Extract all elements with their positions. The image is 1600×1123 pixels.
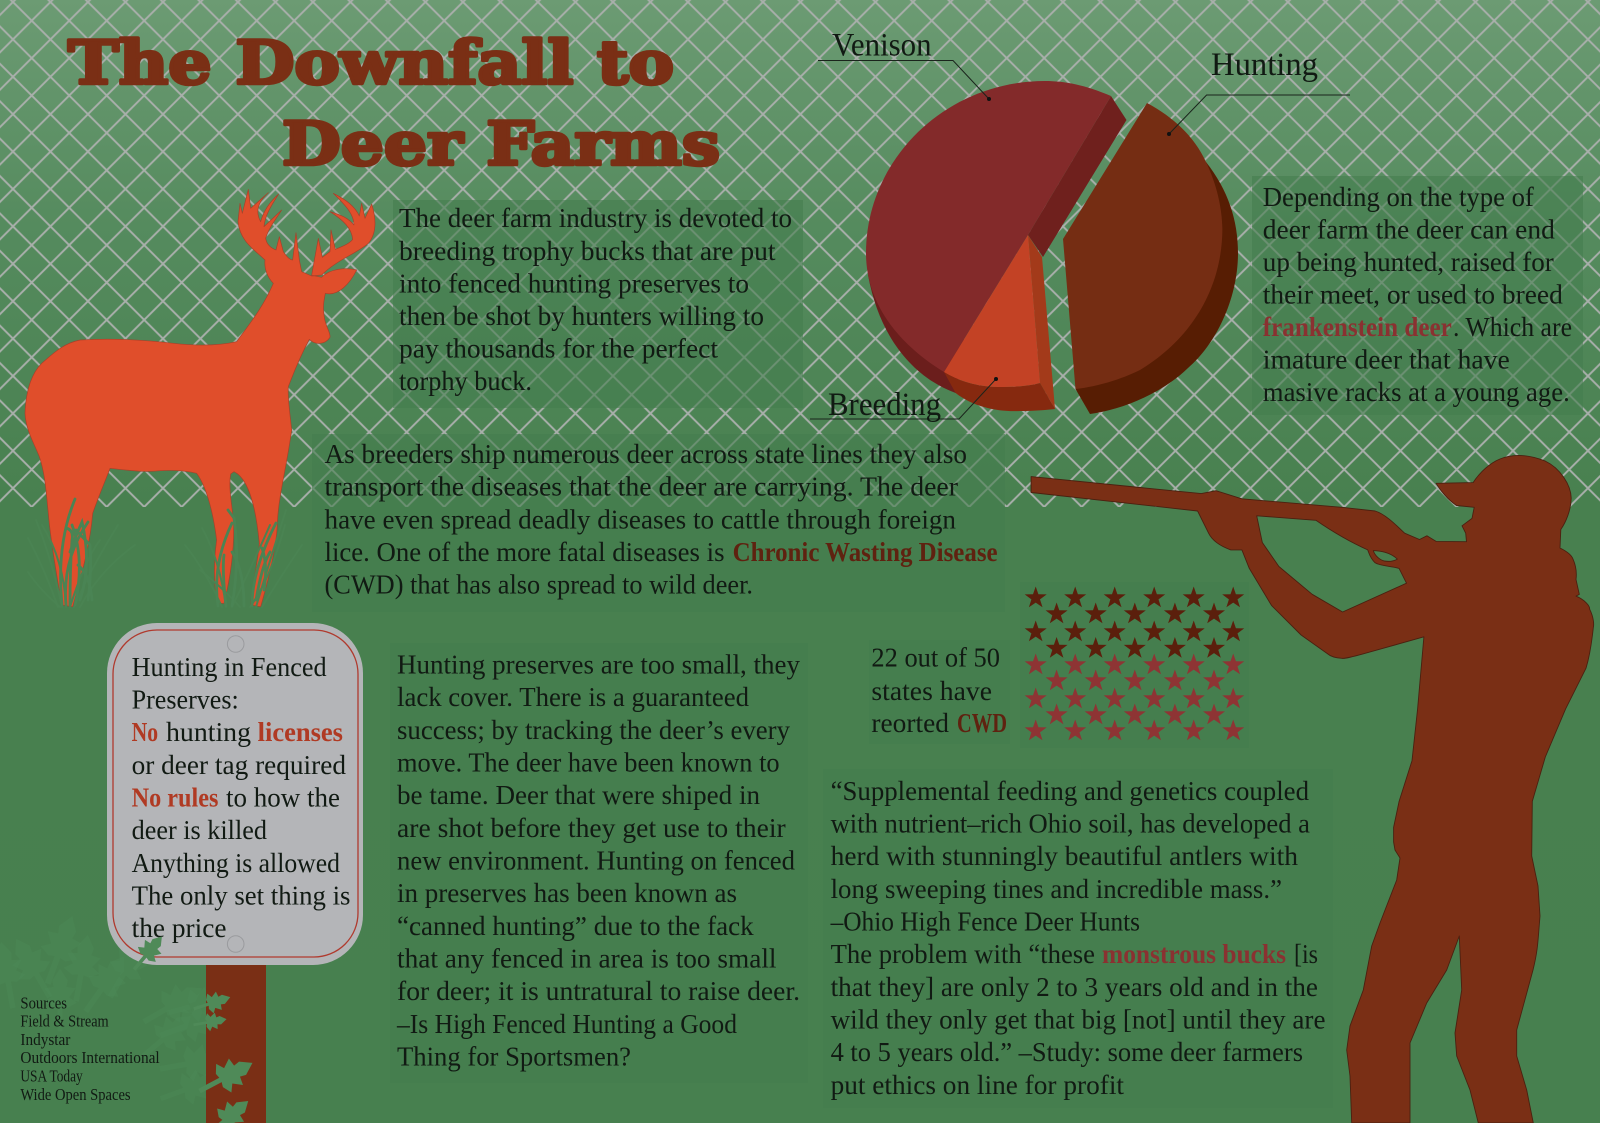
text block: farm types: their meet, or used to breed — [1263, 278, 1563, 309]
text block: preserves: lack cover. There is a guaranteed — [397, 681, 749, 712]
text block: intro: breeding trophy bucks that are put — [399, 235, 776, 266]
text block: disease spread: As breeders ship numerous deer across state lines they also — [324, 438, 967, 469]
text block: preserves: are shot before they get use to their — [397, 812, 786, 843]
text block: farm types: masive racks at a young age. — [1263, 376, 1570, 407]
chart: 3D pie of deer farm types — [866, 81, 1238, 414]
pie label: Venison: Venison — [832, 27, 932, 63]
sign text — [132, 651, 350, 943]
text block: quotes: 4 to 5 years old.” –Study: some deer farmers — [831, 1036, 1303, 1067]
text block: preserves: “canned hunting” due to the fack — [397, 910, 754, 941]
text block: preserves: Thing for Sportsmen? — [397, 1040, 631, 1072]
sign text: the price — [132, 912, 226, 943]
pie label: Breeding: Breeding — [828, 387, 941, 423]
sign text: Anything is allowed — [132, 847, 340, 878]
text block: intro — [399, 202, 792, 396]
sign text: or deer tag required — [132, 749, 346, 780]
pie slice: hunting — [1063, 103, 1238, 414]
text block: sources: Indystar — [20, 1030, 71, 1049]
text block: intro: then be shot by hunters willing to — [399, 300, 764, 331]
text block: disease spread: (CWD) that has also spread to wild deer. — [324, 568, 753, 600]
text block: sources: Outdoors International — [20, 1048, 160, 1067]
sign text: hunting — [166, 716, 251, 747]
title: Deer Farms — [282, 109, 720, 179]
panel: shaded text boxes — [312, 176, 1583, 1108]
text block: preserves: –Is High Fenced Hunting a Good — [396, 1008, 737, 1039]
text block: disease spread: Chronic Wasting Disease — [733, 536, 998, 567]
pie label: Hunting — [1167, 47, 1350, 136]
icon: grass at deer feet — [28, 499, 302, 607]
text block: sources: USA Today — [20, 1067, 83, 1086]
text block: sources: Wide Open Spaces — [20, 1085, 131, 1104]
sign inner border — [113, 630, 358, 957]
text block: intro: torphy buck. — [399, 365, 532, 396]
text block: 22 of 50 states: states have — [871, 675, 992, 706]
icon: shrub behind sign — [0, 910, 232, 1115]
title: The Downfall to — [68, 28, 674, 98]
text block: farm types — [1263, 181, 1572, 407]
text block: disease spread: transport the diseases that the deer are carrying. The deer — [324, 471, 958, 502]
icon: sign post — [206, 960, 266, 1123]
text block: 22 of 50 states — [871, 642, 1007, 738]
text block: farm types: imature deer that have — [1263, 344, 1510, 375]
chart: 50 stars, 22 highlighted — [1025, 586, 1244, 740]
text block: intro: pay thousands for the perfect — [399, 333, 718, 364]
text block: preserves: be tame. Deer that were shiped in — [397, 779, 760, 810]
text block: preserves: new environment. Hunting on fenced — [397, 844, 795, 876]
text block: quotes: put ethics on line for profit — [831, 1069, 1124, 1100]
text block: quotes — [830, 775, 1326, 1100]
text block: sources: Sources — [20, 993, 67, 1012]
panel: fenced preserves sign — [107, 623, 363, 965]
text block: quotes: wild they only get that big [not] until they are — [831, 1004, 1326, 1034]
text block: disease spread — [324, 438, 998, 600]
text block: farm types: Depending on the type of — [1263, 181, 1535, 212]
pie slice: venison — [866, 81, 1126, 393]
text block: intro: into fenced hunting preserves to — [399, 267, 749, 298]
text block: disease spread: have even spread deadly diseases to cattle through foreign — [324, 503, 956, 534]
text block: intro: The deer farm industry is devoted to — [399, 202, 792, 233]
text block: quotes: –Ohio High Fence Deer Hunts — [830, 906, 1140, 936]
sign text: Preserves: — [132, 684, 239, 715]
text block: quotes: The problem with “these — [831, 938, 1095, 969]
text block: farm types: up being hunted, raised for — [1263, 246, 1554, 277]
text block: quotes: with nutrient–rich Ohio soil, has developed a — [831, 808, 1310, 838]
text block: quotes: long sweeping tines and incredible mass.” — [831, 873, 1282, 904]
text block: preserves: that any fenced in area is too small — [397, 942, 777, 974]
text block: preserves: Hunting preserves are too small, they — [397, 648, 800, 680]
stars: states reporting CWD — [1025, 586, 1244, 658]
sign text: No rules — [132, 782, 219, 813]
text block: farm types: . Which are — [1453, 311, 1572, 342]
text block: 22 of 50 states: 22 out of 50 — [871, 642, 1000, 672]
text block: quotes: monstrous bucks — [1102, 938, 1286, 969]
text block: preserves: in preserves has been known as — [397, 877, 737, 908]
icon: shrub leaves over sign and post — [125, 929, 260, 1123]
pie label: Venison — [818, 27, 991, 101]
text block: preserves — [396, 648, 800, 1072]
text block: 22 of 50 states: reorted — [871, 707, 949, 738]
text block: preserves: move. The deer have been known to — [397, 746, 780, 778]
text block: farm types: frankenstein deer — [1263, 311, 1452, 342]
text block: quotes: that they] are only 2 to 3 years old and in the — [831, 971, 1318, 1002]
text block: quotes: “Supplemental feeding and genetics coupled — [831, 775, 1309, 806]
pie label: Hunting: Hunting — [1211, 47, 1318, 83]
sign text: The only set thing is — [132, 880, 350, 911]
text block: 22 of 50 states: CWD — [957, 707, 1007, 738]
sign text: No — [132, 716, 158, 747]
text block: preserves: for deer; it is untratural to raise deer. — [397, 975, 800, 1006]
sign text: to how the — [226, 782, 340, 813]
text block: disease spread: lice. One of the more fatal diseases is — [324, 536, 724, 567]
sign plate — [107, 623, 363, 965]
icon: deer silhouette — [25, 189, 375, 607]
text block: quotes: [is — [1294, 938, 1318, 969]
sign text: licenses — [258, 716, 343, 747]
pie label: Breeding — [810, 377, 998, 423]
text block: farm types: deer farm the deer can end — [1263, 213, 1555, 244]
sign text: deer is killed — [132, 814, 267, 845]
stars: remaining states — [1025, 654, 1244, 740]
pie slice: breeding — [944, 235, 1055, 411]
title — [68, 28, 720, 179]
text block: sources: Field & Stream — [20, 1012, 109, 1031]
text block: quotes: herd with stunningly beautiful antlers with — [831, 840, 1298, 871]
icon: hunter with rifle — [1031, 455, 1594, 1123]
chain-link fence — [0, 0, 1600, 507]
text block: preserves: success; by tracking the deer’s every — [397, 714, 790, 745]
sign text: Hunting in Fenced — [132, 651, 327, 682]
sign screw holes — [227, 636, 244, 952]
text block: sources — [20, 993, 160, 1104]
